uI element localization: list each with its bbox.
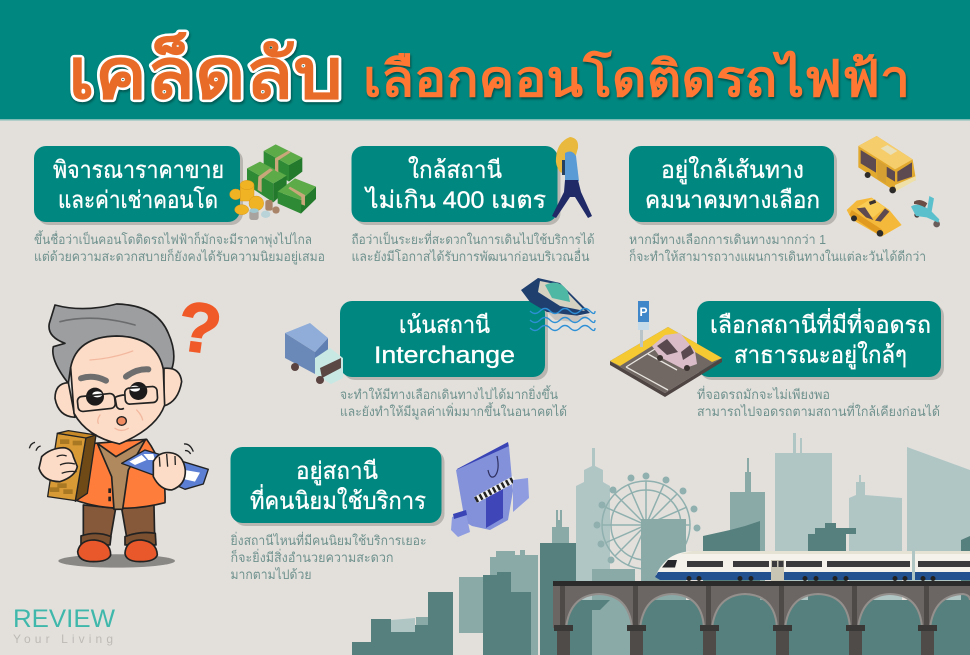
icon: parking lot <box>610 301 722 397</box>
icon: parking lot: P <box>639 305 648 319</box>
logo: Review Your Living: REVIEW <box>13 605 115 633</box>
icon: speedboat <box>521 278 595 330</box>
icon: truck <box>285 323 343 384</box>
ferris wheel <box>594 472 700 569</box>
panel: near station: และยังมีโอกาสได้รับการพัฒนาก่อนบริเวณอื่น <box>352 248 590 264</box>
panel: price: ขึ้นชื่อว่าเป็นคอนโดติดรถไฟฟ้าก็มักจะมีราคาพุ่งไปไกล <box>34 230 312 248</box>
header band <box>0 0 970 120</box>
icon: bus <box>858 136 916 193</box>
panel: alternative transport: ก็จะทำให้สามารถวางแผนการเดินทางในแต่ละวันได้ดีกว่า <box>629 247 926 264</box>
panel: price <box>34 146 325 265</box>
bridge <box>553 581 970 655</box>
panel: popular station: มากตามไปด้วย <box>230 567 312 582</box>
icon: money and coins <box>230 144 316 220</box>
panel: interchange: และยังทำให้มีมูลค่าเพิ่มมากขึ้นในอนาคตได้ <box>340 402 567 420</box>
panel: near station: ใกล้สถานี <box>408 156 502 184</box>
icon: walking woman <box>552 137 592 218</box>
skyline <box>352 433 970 655</box>
panel: parking: ที่จอดรถมักจะไม่เพียงพอ <box>697 386 830 402</box>
panel: near station <box>351 146 594 264</box>
panel: parking: สาธารณะอยู่ใกล้ๆ <box>734 341 907 370</box>
logo: Review Your Living: Your Living <box>13 632 113 646</box>
panel: price: แต่ด้วยความสะดวกสบายก็ยังคงได้รับความนิยมอยู่เสมอ <box>34 247 325 265</box>
panel: interchange: Interchange <box>374 342 515 369</box>
panel: near station: ไม่เกิน 400 เมตร <box>364 186 546 214</box>
panel: alternative transport <box>629 146 926 264</box>
title: เลือกคอนโดติดรถไฟฟ้า <box>363 49 910 107</box>
panel: interchange: จะทำให้มีทางเลือกเดินทางไปได้มากยิ่งขึ้น <box>340 385 558 402</box>
panel: parking: เลือกสถานีที่มีที่จอดรถ <box>710 308 931 339</box>
logo: Review Your Living <box>13 605 115 646</box>
icon: shopping bags <box>451 442 529 537</box>
panel: interchange <box>340 301 567 420</box>
panel: parking <box>697 301 944 419</box>
title <box>68 31 910 113</box>
panel: popular station: อยู่สถานี <box>296 458 378 486</box>
icon: taxi <box>847 198 902 237</box>
panel: alternative transport: อยู่ใกล้เส้นทาง <box>661 156 804 185</box>
character: old man holding brick and train <box>29 304 208 568</box>
icon: question mark: ? <box>173 286 226 370</box>
icon: scooter <box>911 196 940 227</box>
panel: popular station: ที่คนนิยมใช้บริการ <box>250 484 426 515</box>
panel: popular station: ยิ่งสถานีไหนที่มีคนนิยมใช้บริการเยอะ <box>230 532 426 548</box>
panel: popular station <box>230 447 444 582</box>
panel: interchange: เน้นสถานี <box>399 312 490 339</box>
panel: price: และค่าเช่าคอนโด <box>58 186 218 214</box>
train <box>655 551 970 581</box>
panel: near station: ถือว่าเป็นระยะที่สะดวกในการเดินไปใช้บริการได้ <box>351 230 594 247</box>
title: เคล็ดลับ <box>68 31 343 113</box>
panel: price: พิจารณาราคาขาย <box>53 157 224 184</box>
panel: alternative transport: คมนาคมทางเลือก <box>645 187 820 214</box>
panel: popular station: ก็จะยิ่งมีสิ่งอำนวยความสะดวก <box>230 548 394 565</box>
panel: parking: สามารถไปจอดรถตามสถานที่ใกล้เคียงก่อนได้ <box>697 403 940 419</box>
panel: alternative transport: หากมีทางเลือกการเดินทางมากกว่า 1 <box>629 232 826 247</box>
